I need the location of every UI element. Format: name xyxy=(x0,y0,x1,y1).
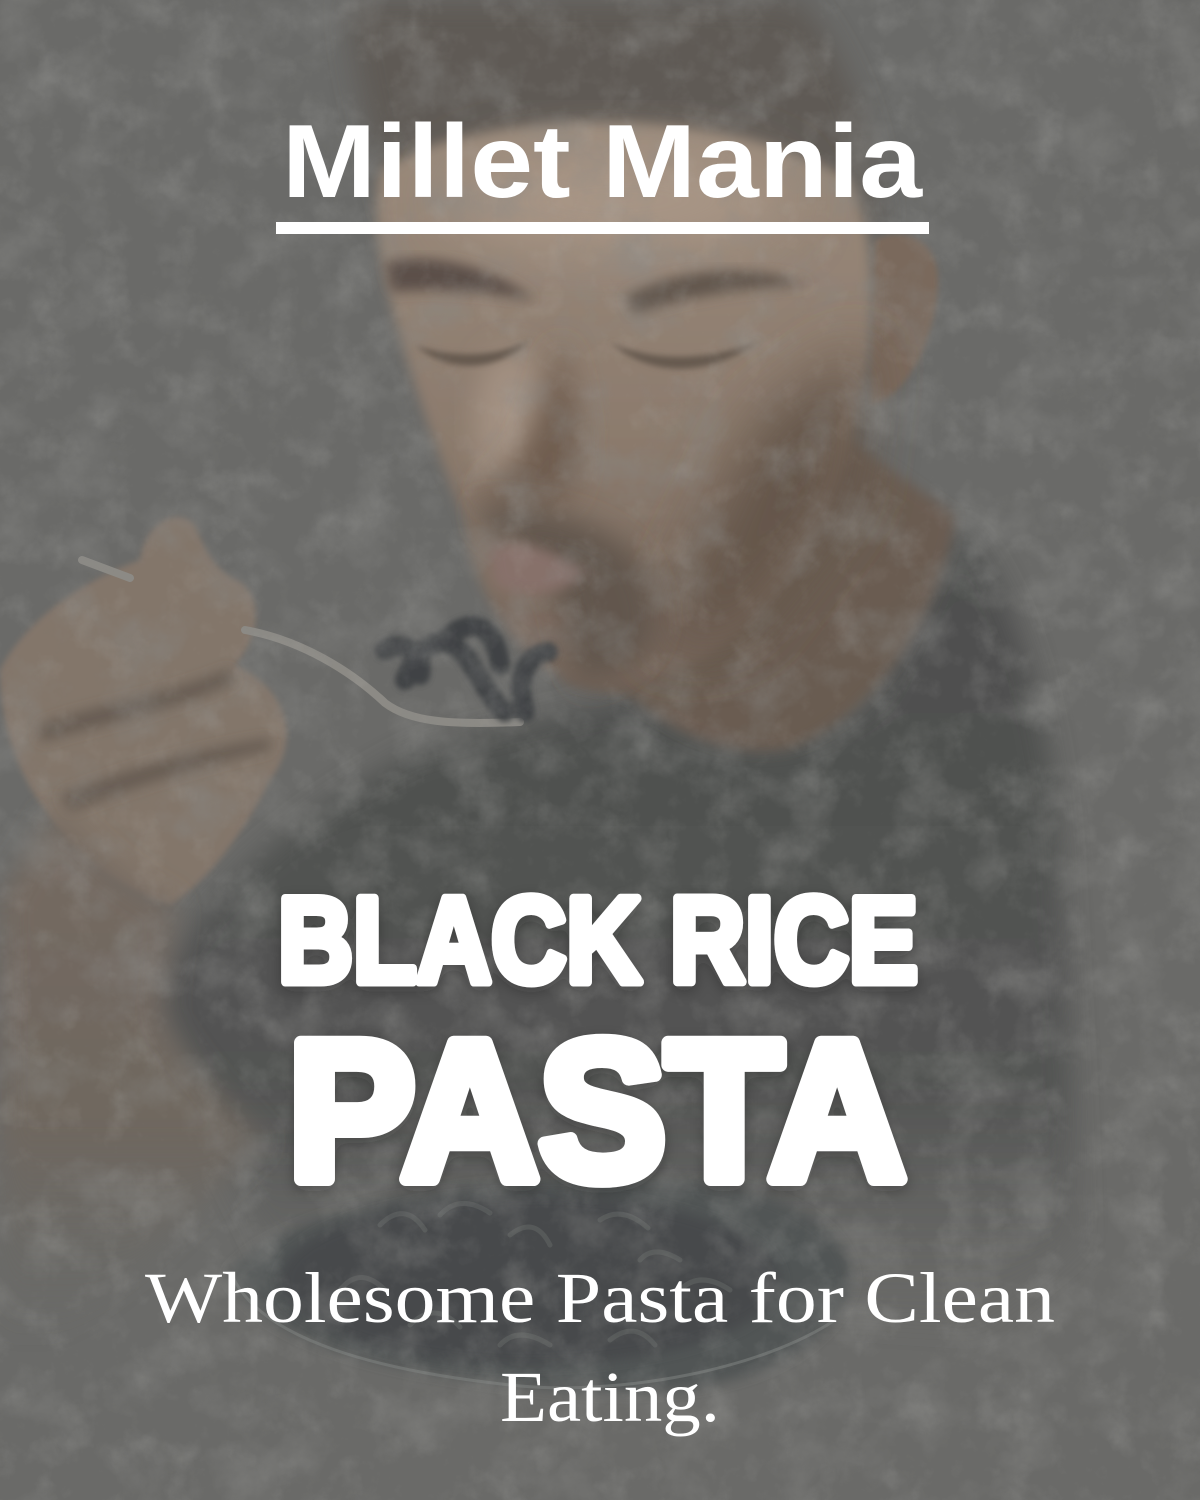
tagline: Wholesome Pasta for Clean xyxy=(145,1258,1055,1338)
heading: Black Rice: BLACK RICE xyxy=(278,872,918,1008)
brow right xyxy=(625,271,810,315)
closed eye left xyxy=(415,340,530,366)
nose bridge highlight xyxy=(475,350,545,490)
lips xyxy=(488,544,585,594)
bowl rim xyxy=(232,1275,835,1388)
hand xyxy=(0,517,287,905)
shirt xyxy=(150,525,1080,1330)
tagline: Eating. xyxy=(500,1357,720,1437)
face xyxy=(377,122,872,688)
tagline xyxy=(145,1258,1055,1437)
forehead glow xyxy=(450,150,790,250)
title: Millet Mania: Millet Mania xyxy=(282,104,923,220)
finger shadows xyxy=(40,668,270,812)
closed eye right xyxy=(610,340,760,369)
bowl xyxy=(228,1180,851,1392)
forearm xyxy=(0,810,265,1340)
ear xyxy=(870,234,938,405)
neck xyxy=(560,420,955,751)
title underline xyxy=(276,222,929,234)
nose shadow xyxy=(480,340,580,508)
heading: Pasta: PASTA xyxy=(288,1000,906,1221)
fork xyxy=(82,560,520,723)
moustache and beard xyxy=(475,505,657,685)
pasta strands in bowl xyxy=(340,1203,730,1345)
bowl pasta xyxy=(280,1195,780,1365)
cheek shadow xyxy=(650,340,870,650)
hair xyxy=(350,0,880,235)
pasta on fork xyxy=(385,626,548,712)
brow left xyxy=(385,259,535,300)
